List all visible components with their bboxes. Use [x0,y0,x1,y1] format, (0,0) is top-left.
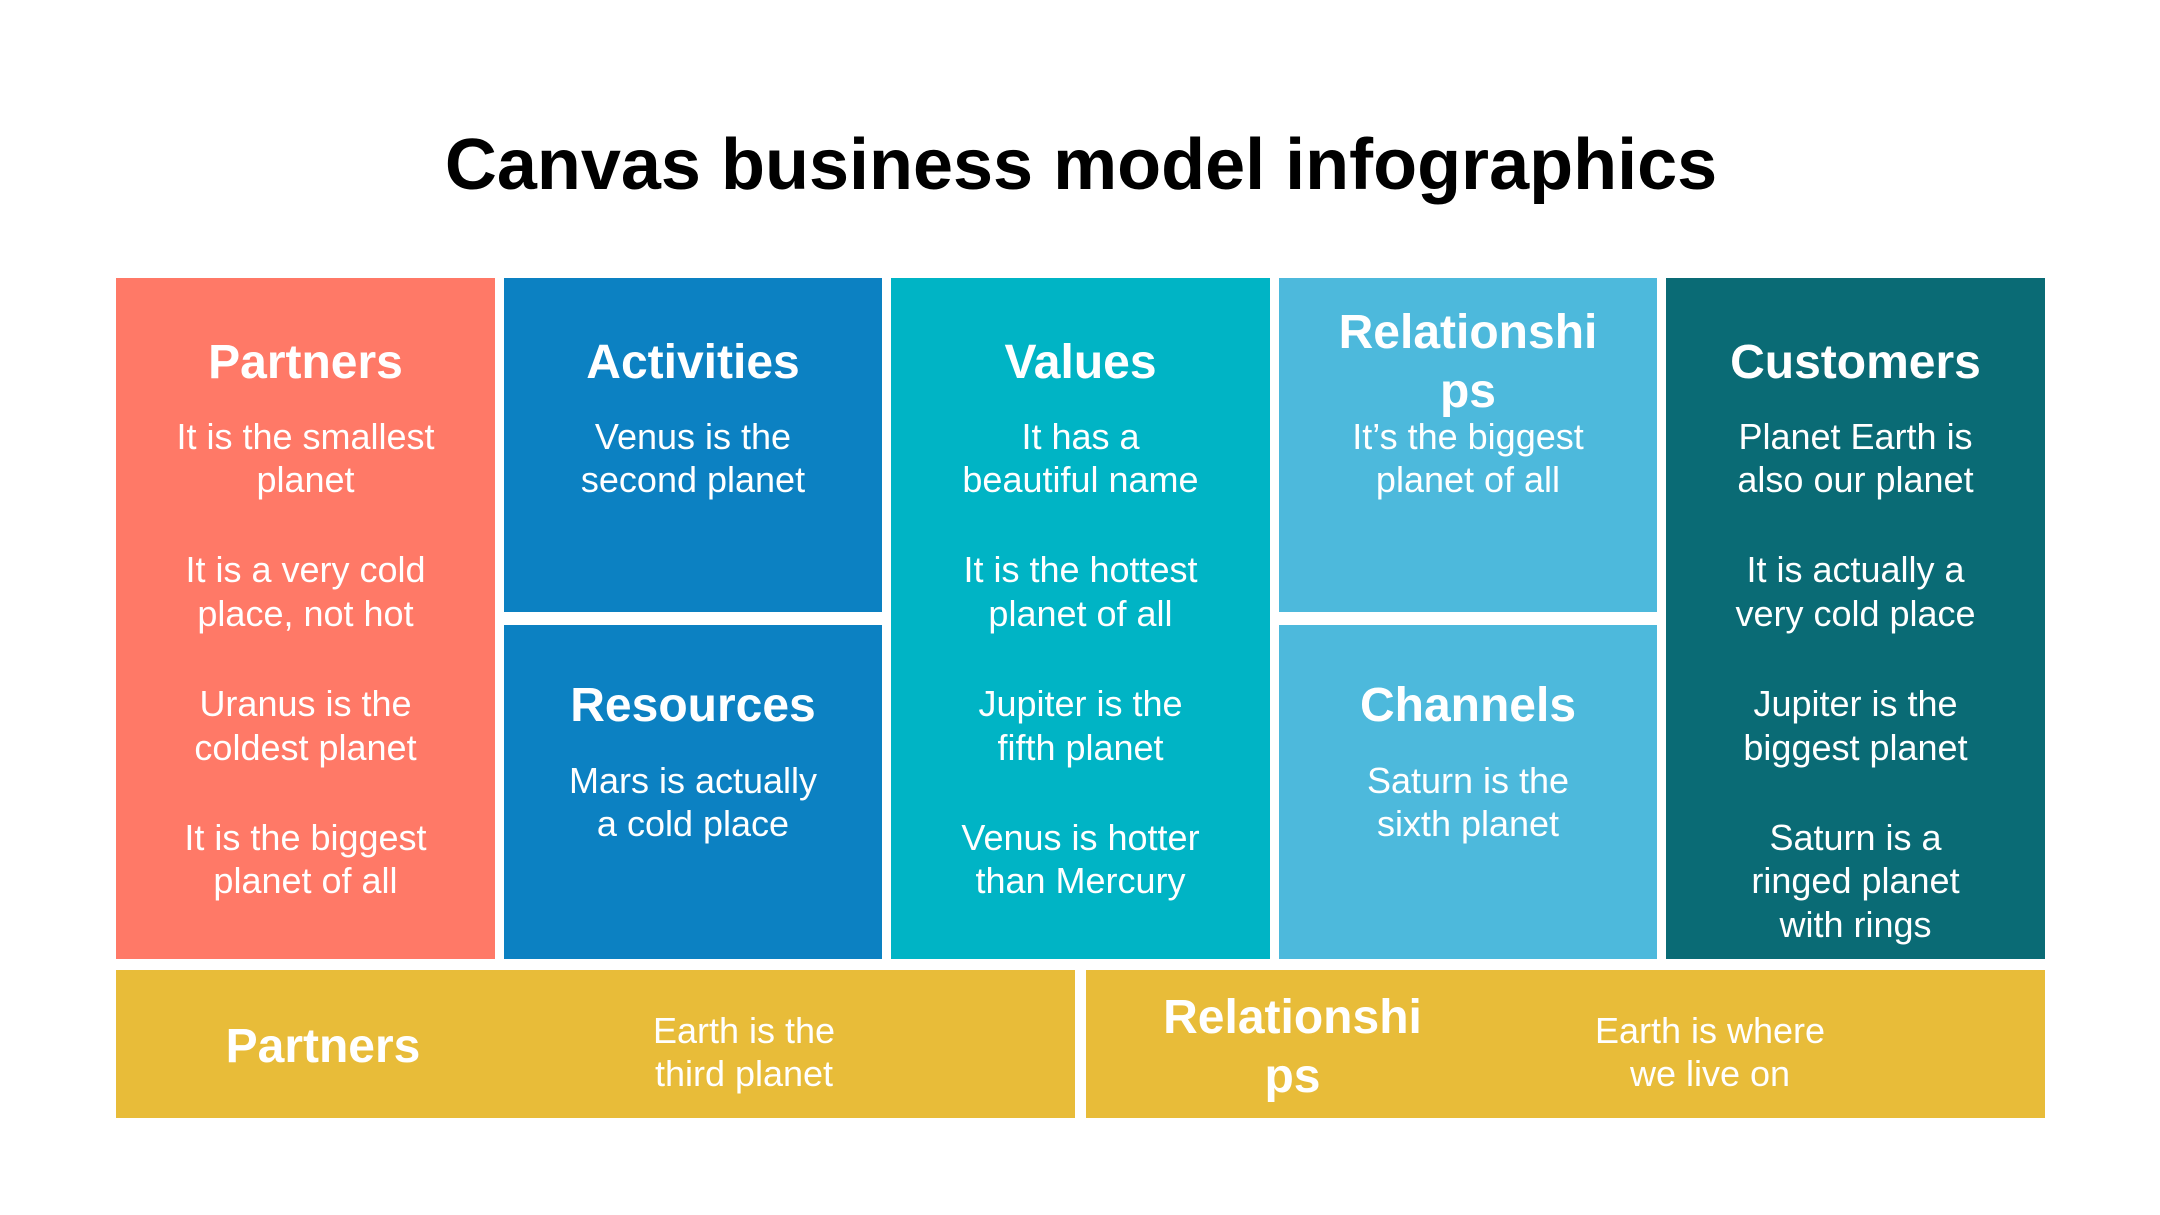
text: customers list: It is actually a [1746,549,1965,590]
text: bottom partners: third planet [655,1053,833,1094]
text: values list: Venus is hotter [961,817,1200,858]
text: relationships: planet of all [1376,459,1560,500]
text: customers list: also our planet [1737,459,1974,500]
panel: channels [1279,625,1657,959]
text: customers list: Planet Earth is [1738,416,1973,456]
panel: activities [504,278,882,612]
text: customers list: with rings [1779,904,1932,945]
panel: partners [116,278,495,959]
text: bottom partners: Earth is the [653,1010,835,1050]
heading: relationships: ps [1440,364,1496,418]
text: customers list: ringed planet [1751,860,1960,901]
panel: relationships [1279,278,1657,612]
text: bottom relationships: we live on [1630,1053,1790,1094]
text: bottom partners [653,1010,835,1094]
text: partners list: planet of all [213,860,398,901]
heading: customers: Customers [1730,336,1981,388]
text: values list: It has a [1021,416,1140,456]
text: partners list: It is the biggest [184,817,427,858]
panel: bottom partners [116,970,1075,1118]
text: activities: Venus is the [595,416,791,456]
text: values list: planet of all [988,593,1173,634]
text: values list: than Mercury [975,860,1186,901]
panel: customers [1666,278,2045,959]
text: partners list [176,416,435,901]
heading: partners: Partners [208,336,403,388]
text: activities [581,416,805,500]
panel: bottom relationships [1086,970,2045,1118]
text: values list [961,416,1200,901]
panel: values [891,278,1270,959]
text: customers list [1735,416,1976,945]
text: relationships [1352,416,1584,500]
text: customers list: Saturn is a [1769,817,1942,858]
text: channels [1367,760,1569,844]
heading: bottom relationships: Relationshi [1163,991,1422,1044]
text: resources [569,760,817,844]
text: values list: Jupiter is the [978,683,1183,724]
text: values list: fifth planet [997,727,1164,768]
text: partners list: It is the smallest [176,416,435,456]
text: partners list: Uranus is the [199,683,412,724]
text: bottom relationships [1595,1010,1825,1094]
text: activities: second planet [581,459,805,500]
text: customers list: biggest planet [1743,727,1968,768]
heading: relationships: Relationshi [1339,306,1597,358]
heading: bottom partners: Partners [226,1020,420,1073]
text: channels: Saturn is the [1367,760,1569,800]
text: bottom relationships: Earth is where [1595,1010,1825,1050]
text: partners list: place, not hot [197,593,414,634]
text: customers list: very cold place [1735,593,1976,634]
title: Canvas business model infographics [445,125,1717,205]
text: customers list: Jupiter is the [1753,683,1958,724]
text: partners list: coldest planet [194,727,417,768]
heading: values: Values [1004,336,1157,388]
heading: bottom relationships [1163,991,1422,1103]
panel: resources [504,625,882,959]
heading: resources: Resources [570,678,816,732]
text: channels: sixth planet [1377,803,1559,844]
text: relationships: It’s the biggest [1352,416,1584,456]
heading: bottom relationships: ps [1264,1050,1320,1103]
text: values list: beautiful name [962,459,1199,500]
text: partners list: It is a very cold [185,549,426,590]
heading: channels: Channels [1360,678,1576,732]
heading: relationships [1339,306,1597,418]
text: resources: a cold place [597,803,789,844]
text: resources: Mars is actually [569,760,817,800]
text: values list: It is the hottest [963,549,1198,590]
heading: activities: Activities [586,336,800,388]
text: partners list: planet [256,459,355,500]
